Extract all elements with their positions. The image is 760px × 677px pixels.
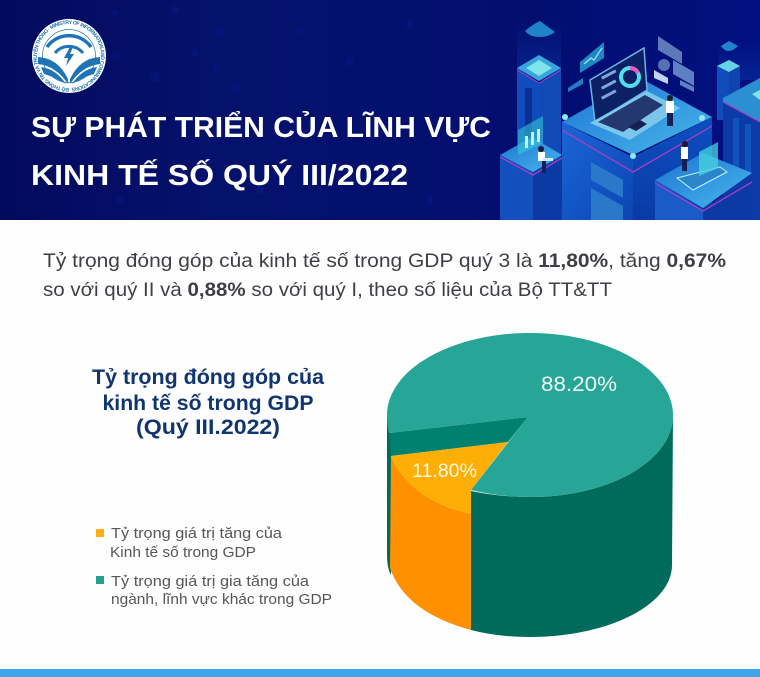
legend item: digital economy: Kinh tế số trong GDP	[110, 544, 256, 561]
building: tall left tower	[517, 55, 561, 200]
chart heading: (Quý III.2022)	[136, 416, 280, 439]
icon: floating chart panels	[568, 36, 694, 92]
building: small left platform	[500, 137, 562, 220]
icon: laptop	[590, 48, 680, 140]
icon: holographic bar chart	[518, 116, 543, 155]
chart heading: kinh tế số trong GDP	[102, 392, 314, 415]
pie top: other sectors	[387, 333, 673, 497]
chart heading	[92, 366, 324, 439]
legend item: other sectors: ngành, lĩnh vực khác trong GDP	[111, 591, 332, 608]
intro text: Tỷ trọng đóng góp của kinh tế số trong GDP quý 3 là 11,80% , tăng 0,67%	[43, 250, 726, 272]
icon: left floating shield	[525, 21, 555, 37]
logo: ministry emblem: BỘ THÔNG TIN VÀ TRUYỀN THÔNG · MINISTRY OF INFORMATION AND COMMUNICATIONS	[32, 20, 105, 92]
chart heading: Tỷ trọng đóng góp của	[92, 366, 324, 389]
pie side: other sectors	[471, 415, 673, 637]
building: far right block	[723, 78, 760, 220]
building: right lower platform	[655, 142, 752, 220]
intro text: so với quý II và 0,88% so với quý I, theo số liệu của Bộ TT&TT	[43, 279, 612, 301]
title: KINH TẾ SỐ QUÝ III/2022	[31, 159, 408, 192]
pie top: digital economy	[391, 442, 508, 514]
3D pie chart	[387, 333, 673, 637]
label: 11.80%: 11.80%	[412, 461, 477, 482]
illustration: isometric data-center buildings	[500, 20, 760, 220]
legend	[96, 525, 332, 608]
icon: right floating shield	[721, 41, 738, 51]
legend item: other sectors	[96, 573, 332, 608]
legend item: digital economy: Tỷ trọng giá trị tăng của	[111, 525, 283, 542]
label: 88.20%: 88.20%	[541, 373, 617, 396]
pie side: digital economy	[390, 456, 471, 630]
building: central main tower	[562, 78, 712, 220]
legend item: other sectors: Tỷ trọng giá trị gia tăng của	[111, 573, 310, 590]
pie side: left strip	[387, 415, 391, 575]
building: tall right tower	[717, 60, 740, 120]
title: SỰ PHÁT TRIỂN CỦA LĨNH VỰC	[31, 111, 491, 144]
pie inner wall	[389, 417, 528, 456]
title	[31, 111, 491, 192]
header banner	[0, 0, 760, 220]
legend item: digital economy	[96, 525, 283, 561]
figures: people	[538, 95, 688, 173]
bottom bar	[0, 669, 760, 677]
intro text	[43, 250, 726, 301]
